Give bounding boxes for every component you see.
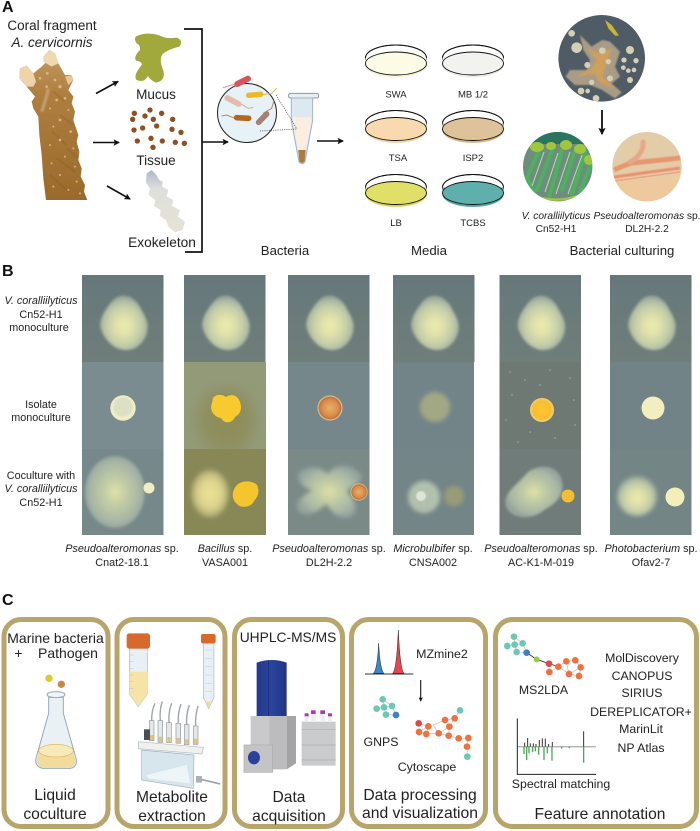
text: coral fragment label (7, 18, 97, 50)
icon: exoskeleton (146, 170, 185, 232)
text: strain labels: Pseudoalteromonas sp. (484, 543, 598, 555)
text: marine bacteria + pathogen (7, 630, 104, 661)
bracket (184, 29, 202, 252)
plate column: Pseudoalteromonas Cnat2-18.1 (82, 275, 164, 535)
text: mucus: Mucus (136, 87, 176, 102)
text: data acquisition: Data (273, 789, 306, 806)
text: tissue: Tissue (136, 153, 176, 168)
text: row labels: Cn52-H1 (19, 309, 63, 321)
dish: MB 1/2 (442, 45, 504, 78)
text: media labels: TSA (389, 153, 408, 164)
chart: Cytoscape network (415, 707, 472, 760)
text: row labels (4, 295, 78, 509)
text: row labels: monoculture (9, 322, 69, 334)
text: metabolite extraction: Metabolite (136, 789, 208, 806)
text: annotation tools list (590, 651, 692, 755)
text: media labels: SWA (385, 90, 407, 100)
text: data acquisition: acquisition (252, 808, 326, 825)
text: spectral matching: Spectral matching (512, 777, 610, 791)
dish: TSA (366, 110, 426, 143)
text: strain labels: VASA001 (202, 557, 248, 569)
icon: flask with coculture (36, 675, 76, 768)
photo: Pseudoalteromonas plate (612, 132, 682, 202)
plate column: Pseudoalteromonas AC-K1-M-019 (500, 275, 581, 535)
chart: GNPS network (373, 696, 399, 718)
text: strain labels: Photobacterium sp. (604, 543, 698, 555)
text: feature annotation: Feature annotation (535, 806, 665, 823)
text: marine bacteria + pathogen: Marine bacteria (7, 630, 104, 646)
panel: feature annotation (496, 620, 696, 826)
panel: C metabolomics workflow (2, 592, 696, 826)
text: MZmine2: MZmine2 (416, 647, 468, 661)
text: row labels: Cn52-H1 (19, 497, 63, 509)
arrow: plate to isolates (601, 110, 603, 134)
chart: chromatogram peaks (365, 630, 413, 674)
text: data processing and visualization: and visualization (362, 805, 478, 822)
text: strain labels: Pseudoalteromonas sp. (272, 543, 386, 555)
arrow: coral to exoskeleton (107, 186, 130, 199)
text: isolate labels: DL2H-2.2 (625, 224, 669, 235)
text: metabolite extraction: extraction (138, 808, 206, 825)
text: data processing and visualization (362, 787, 478, 822)
icon: coral fragment (19, 50, 87, 200)
text: coral fragment label: Coral fragment (7, 18, 97, 33)
icon: mass spectrometer (244, 660, 296, 772)
text: liquid coculture: Liquid (34, 787, 76, 804)
text: strain labels: Cnat2-18.1 (95, 557, 149, 569)
arrow: coral to tissue (93, 142, 119, 144)
text: UHPLC-MS/MS: UHPLC-MS/MS (240, 630, 336, 645)
text: annotation tools list: CANOPUS (612, 669, 672, 683)
text: isolate labels (522, 211, 700, 235)
text: strain labels: CNSA002 (409, 557, 457, 569)
text: strain labels: Ofav2-7 (632, 557, 670, 569)
icon: conical tubes (127, 633, 216, 709)
text: media labels: LB (390, 218, 402, 229)
text: liquid coculture: coculture (23, 806, 87, 823)
text: media labels: TCBS (460, 218, 486, 229)
icon: extraction manifold (138, 702, 220, 788)
text: strain labels: DL2H-2.2 (306, 557, 352, 569)
chart: MS2LDA network (504, 633, 584, 679)
text: row labels: Isolate (25, 399, 57, 411)
text: annotation tools list: MarinLit (619, 722, 663, 736)
heading: C: C (2, 592, 14, 609)
text: isolate labels: Pseudoalteromonas sp. (593, 211, 700, 222)
text: annotation tools list: SIRIUS (622, 686, 662, 700)
text: data processing and visualization: Data processing (363, 787, 477, 804)
icon: magnified bacteria (218, 79, 277, 142)
text: isolate labels: Cn52-H1 (536, 224, 577, 235)
text: annotation tools list: NP Atlas (618, 741, 664, 755)
text: row labels: V. coralliilyticus (4, 483, 78, 495)
text: data acquisition (252, 789, 326, 825)
dish: LB (366, 174, 426, 207)
panel: data acquisition (234, 620, 342, 826)
icon: microcentrifuge tube (289, 93, 319, 164)
icon: autosampler with vials (302, 710, 336, 766)
text: media labels (385, 90, 488, 229)
dish: SWA (366, 45, 426, 77)
text: row labels: V. coralliilyticus (4, 295, 78, 307)
plate column: Photobacterium Ofav2-7 (610, 275, 692, 535)
text: coral fragment label: A. cervicornis (10, 35, 93, 50)
dish: ISP2 (442, 110, 504, 143)
arrow: coral to mucus (96, 82, 118, 94)
text: bacterial culturing: Bacterial culturing (570, 243, 674, 258)
photo: V. coralliilyticus plate (523, 132, 594, 202)
text: GNPS: GNPS (363, 735, 399, 749)
panel: liquid coculture (4, 620, 108, 826)
text: annotation tools list: MolDiscovery (605, 651, 680, 665)
panel: A sample collection and culturing (2, 0, 700, 258)
text: strain labels: AC-K1-M-019 (508, 557, 574, 569)
text: MS2LDA: MS2LDA (519, 683, 569, 697)
panel: metabolite extraction (117, 620, 225, 826)
text: strain labels (65, 543, 698, 569)
plate column: Pseudoalteromonas DL2H-2.2 (288, 275, 370, 535)
text: marine bacteria + pathogen: + (14, 645, 23, 661)
text: media labels: ISP2 (463, 153, 483, 164)
dotted zoom lines (260, 95, 297, 131)
text: metabolite extraction (136, 789, 208, 825)
text: strain labels: Bacillus sp. (198, 543, 252, 555)
text: Cytoscape: Cytoscape (398, 760, 456, 774)
text: isolate labels: V. coralliilyticus (522, 211, 590, 222)
arrow: tube to media (317, 140, 343, 142)
panel: data processing and visualization (352, 620, 486, 826)
icon: mucus blob (135, 34, 181, 83)
text: media: Media (411, 243, 448, 258)
text: media labels: MB 1/2 (458, 90, 488, 100)
text: strain labels: Microbulbifer sp. (393, 543, 473, 555)
text: row labels: Coculture with (7, 470, 75, 482)
icon: culture media dishes (366, 45, 504, 207)
chart: spectral matching mirror plot (517, 718, 596, 774)
heading: B: B (2, 263, 14, 280)
text: exoskeleton: Exokeleton (128, 235, 196, 250)
text: annotation tools list: DEREPLICATOR+ (590, 705, 692, 719)
panel: B coculture plates (2, 263, 698, 569)
text: strain labels: Pseudoalteromonas sp. (65, 543, 179, 555)
dish: TCBS (442, 174, 504, 207)
icon: tissue dots (130, 107, 187, 150)
plate column: Bacillus VASA001 (184, 275, 266, 535)
photo: bacterial plate (558, 15, 645, 102)
text: bacteria: Bacteria (261, 243, 310, 258)
arrow: bracket to bacteria (202, 141, 228, 143)
plate column: Microbulbifer CNSA002 (393, 275, 474, 535)
text: marine bacteria + pathogen: Pathogen (38, 645, 98, 661)
text: liquid coculture (23, 787, 87, 823)
text: row labels: monoculture (11, 412, 71, 424)
arrow: peaks to network (420, 680, 422, 701)
